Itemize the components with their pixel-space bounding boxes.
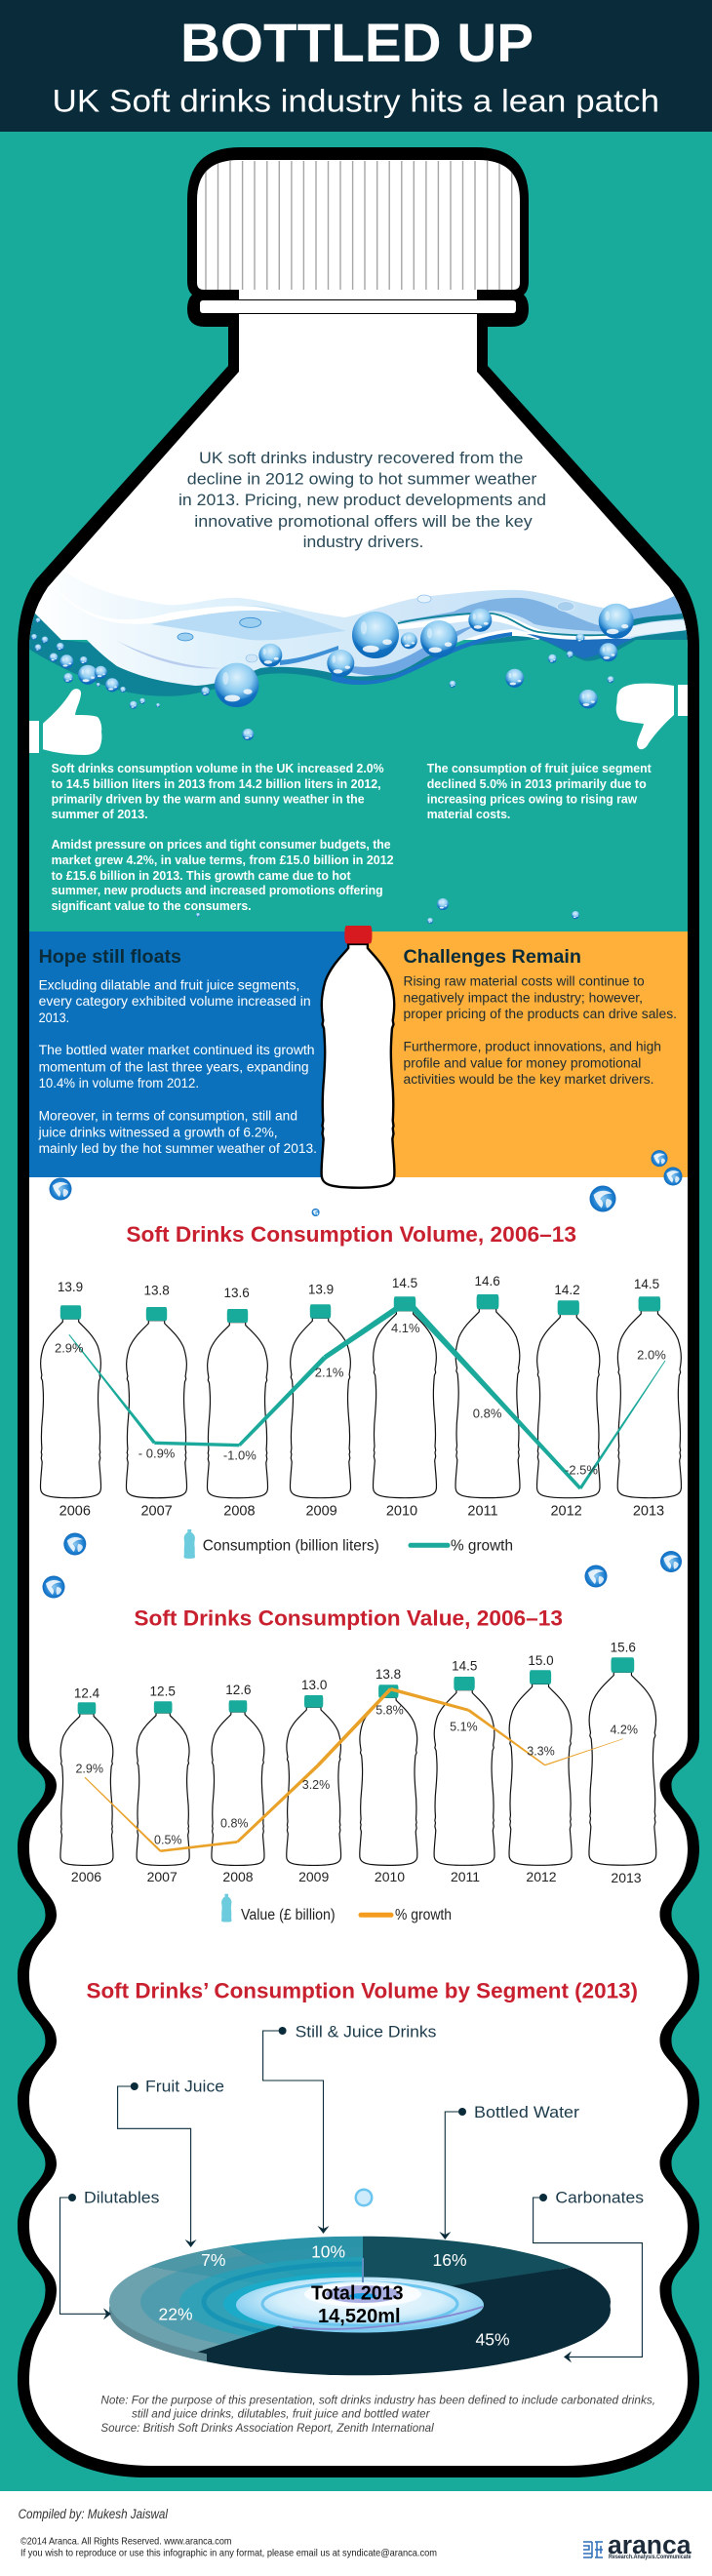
hope text: 10.4% in volume from 2012.: [39, 1076, 199, 1090]
callout: carbonates: Carbonates: [555, 2189, 644, 2206]
callout: carbonates: [534, 2189, 644, 2362]
challenges text: activities would be the key market drivers.: [404, 1072, 653, 1087]
value legend: Value (£ billion): [241, 1907, 336, 1923]
chart title: segment: Soft Drinks’ Consumption Volume by Segment (2013): [86, 1978, 638, 2002]
pie percentages: [158, 2241, 510, 2349]
text: fruit juice decline: increasing prices owing to rising raw: [427, 792, 637, 806]
value years: 2007: [147, 1869, 178, 1884]
text: volume growth: summer of 2013.: [52, 808, 148, 821]
globe bubbles: [43, 1150, 683, 1598]
bottle cap: [195, 156, 527, 302]
hope text: Moreover, in terms of consumption, still and: [39, 1108, 297, 1123]
value growth labels: 3.2%: [302, 1778, 330, 1792]
pie percentages: 10%: [311, 2241, 345, 2261]
volume values: 14.5: [634, 1277, 659, 1291]
pie percentages: 45%: [475, 2329, 510, 2349]
sector: bottled water: [363, 2236, 573, 2286]
sector: dilutables: [98, 2260, 360, 2368]
text: fruit juice decline: declined 5.0% in 2013 primarily due to: [427, 777, 647, 791]
volume legend: [184, 1529, 513, 1559]
sector: still and juice drinks: [195, 2224, 363, 2302]
chart title: value: Soft Drinks Consumption Value, 2006–13: [134, 1606, 563, 1631]
disc rim: [109, 2251, 611, 2376]
volume years: 2011: [467, 1503, 498, 1519]
volume years: 2009: [305, 1503, 337, 1519]
intro text: innovative promotional offers will be the key: [194, 512, 533, 531]
value years: 2008: [222, 1869, 254, 1884]
text: volume growth: [52, 762, 394, 913]
callout: still and juice drinks: [263, 2023, 436, 2234]
value values: [74, 1641, 636, 1700]
text: volume growth: Soft drinks consumption volume in the UK increased 2.0%: [52, 762, 384, 775]
value values: 15.6: [611, 1641, 636, 1655]
volume legend: % growth: [451, 1537, 513, 1554]
volume values: 13.8: [143, 1284, 170, 1298]
text: fruit juice decline: [427, 762, 653, 821]
volume years: 2008: [223, 1503, 256, 1519]
text: volume growth: significant value to the consumers.: [52, 899, 252, 913]
value values: 12.4: [74, 1685, 100, 1700]
text: volume growth: primarily driven by the warm and sunny weather in the: [52, 792, 365, 806]
intro text: [178, 449, 546, 551]
center pool: [236, 2258, 484, 2333]
water wave: [28, 569, 688, 696]
text: volume growth: summer, new products and increased promotions offering: [52, 884, 383, 897]
teal content area: [0, 640, 712, 932]
bottle neck ring: [200, 300, 516, 313]
decorative drop: [355, 2189, 373, 2206]
header band: [0, 0, 712, 132]
sector: carbonates: [197, 2267, 611, 2355]
water ripples: [140, 2247, 579, 2357]
volume years: 2013: [633, 1503, 664, 1519]
volume years: 2012: [550, 1503, 582, 1519]
value years: 2010: [375, 1869, 405, 1884]
copyright text: ©2014 Aranca. All Rights Reserved. www.aranca.com: [20, 2536, 232, 2548]
text: volume growth: market grew 4.2%, in value terms, from £15.0 billion in 2012: [52, 853, 394, 867]
copyright text: If you wish to reproduce or use this infographic in any format, please email us at syndicate@aranca.com: [20, 2548, 437, 2559]
callout: bottled water: Bottled Water: [474, 2103, 579, 2121]
pie center total: 14,520ml: [318, 2306, 401, 2327]
callout: bottled water: [439, 2103, 579, 2239]
intro text: UK soft drinks industry recovered from the: [199, 449, 523, 467]
volume growth labels: - 0.9%: [138, 1447, 176, 1461]
central bottle illustration: [322, 926, 394, 1188]
hope text: juice drinks witnessed a growth of 6.2%,: [38, 1126, 278, 1139]
volume values: 14.6: [474, 1274, 500, 1288]
value growth labels: 0.5%: [154, 1833, 182, 1846]
value values: 13.0: [301, 1678, 327, 1692]
volume bottles: [40, 1294, 682, 1498]
logo: aranca: aranca: [608, 2530, 692, 2559]
value years: 2006: [71, 1869, 101, 1884]
panel: challenges remain: [360, 931, 688, 1177]
heading: challenges remain: Challenges Remain: [404, 947, 581, 968]
water bubbles: [31, 595, 634, 924]
pie sectors: [109, 2236, 611, 2355]
icon: thumbs down: [616, 684, 688, 749]
challenges text: Furthermore, product innovations, and high: [404, 1040, 661, 1054]
callout: dilutables: Dilutables: [84, 2189, 159, 2206]
icon: thumbs up: [28, 689, 101, 755]
intro text: industry drivers.: [303, 533, 423, 551]
value years: 2009: [298, 1869, 329, 1884]
value years: 2013: [611, 1870, 642, 1885]
challenges text: negatively impact the industry; however,: [404, 990, 643, 1005]
volume values: 14.5: [392, 1276, 417, 1290]
subtitle: UK Soft drinks industry hits a lean patch: [53, 84, 659, 119]
text: volume growth: to 14.5 billion liters in 2013 from 14.2 billion liters in 2012,: [52, 777, 381, 791]
challenges text: [404, 974, 677, 1087]
volume values: [59, 1276, 659, 1297]
challenges text: Rising raw material costs will continue to: [404, 974, 645, 989]
pie percentages: 7%: [201, 2250, 225, 2270]
volume growth labels: -2.5%: [565, 1463, 598, 1478]
callout: fruit juice: [118, 2078, 224, 2247]
chart: consumption volume: [40, 1222, 682, 1559]
value growth line: [85, 1687, 623, 1852]
volume growth labels: 2.9%: [55, 1340, 84, 1356]
note and source: still and juice drinks, dilutables, fruit juice and bottled water: [132, 2407, 431, 2421]
chart: volume by segment: [59, 1982, 644, 2376]
volume values: 13.9: [58, 1280, 83, 1294]
volume values: 13.9: [308, 1283, 334, 1297]
value bottles: [60, 1657, 656, 1865]
hope text: The bottled water market continued its growth: [39, 1043, 315, 1057]
volume legend: Consumption (billion liters): [203, 1537, 379, 1554]
value years: [72, 1873, 641, 1882]
callout: dilutables: [60, 2189, 159, 2319]
pie percentages: 22%: [158, 2305, 193, 2324]
intro text: in 2013. Pricing, new product developments and: [178, 491, 546, 509]
pie percentages: 16%: [432, 2250, 467, 2270]
text: volume growth: Amidst pressure on prices and tight consumer budgets, the: [52, 838, 391, 852]
text: fruit juice decline: material costs.: [427, 808, 510, 821]
text: fruit juice decline: The consumption of fruit juice segment: [427, 762, 653, 775]
compiled by credit: Compiled by: Mukesh Jaiswal: [19, 2507, 169, 2521]
value growth labels: 4.2%: [610, 1724, 638, 1737]
hope text: every category exhibited volume increased in: [39, 994, 311, 1009]
volume growth line: [68, 1301, 665, 1489]
challenges text: proper pricing of the products can drive sales.: [404, 1007, 677, 1021]
pie center total: Total 2013: [311, 2282, 404, 2304]
value years: 2011: [451, 1869, 480, 1884]
heading: hope still floats: Hope still floats: [39, 947, 181, 968]
value values: 13.8: [376, 1667, 401, 1682]
hope text: 2013.: [39, 1011, 69, 1025]
chart: consumption value: [60, 1606, 656, 1923]
pie center total: [311, 2282, 404, 2327]
callout: still and juice drinks: Still & Juice Drinks: [296, 2023, 436, 2041]
hope text: [38, 977, 317, 1156]
volume years: 2006: [59, 1503, 91, 1519]
note and source: Note: For the purpose of this presentation, soft drinks industry has been defined to include carbonated drinks,: [100, 2393, 655, 2406]
value growth labels: 5.8%: [376, 1704, 404, 1718]
value legend: [221, 1894, 452, 1923]
challenges text: profile and value for money promotional: [404, 1055, 641, 1071]
copyright text: [20, 2536, 437, 2559]
hope text: momentum of the last three years, expanding: [39, 1059, 309, 1074]
text: volume growth: to £15.6 billion in 2013. This growth came due to hot: [52, 869, 351, 883]
hope text: Excluding dilatable and fruit juice segments,: [39, 977, 299, 993]
value values: 12.5: [150, 1684, 176, 1699]
volume years: 2010: [386, 1503, 417, 1519]
hope text: mainly led by the hot summer weather of 2013.: [39, 1141, 317, 1156]
value growth labels: 5.1%: [450, 1720, 478, 1733]
callout: fruit juice: Fruit Juice: [145, 2078, 224, 2096]
intro text: decline in 2012 owing to hot summer weather: [187, 470, 537, 488]
volume growth labels: 0.8%: [473, 1406, 502, 1420]
value values: 12.6: [225, 1683, 252, 1697]
volume values: 14.2: [554, 1283, 580, 1297]
volume growth labels: 2.1%: [315, 1366, 344, 1380]
volume growth labels: 2.0%: [637, 1347, 666, 1362]
value growth labels: 2.9%: [75, 1762, 103, 1775]
title: BOTTLED UP: [180, 12, 534, 73]
volume years: 2007: [140, 1503, 173, 1519]
value growth labels: 3.3%: [527, 1744, 555, 1758]
note and source: Source: British Soft Drinks Association Report, Zenith International: [100, 2421, 434, 2435]
value growth labels: [75, 1704, 638, 1846]
chart title: volume: Soft Drinks Consumption Volume, 2006–13: [126, 1222, 576, 1247]
value growth labels: 0.8%: [220, 1817, 249, 1831]
value legend: % growth: [395, 1907, 452, 1923]
panel: hope still floats: [28, 931, 360, 1177]
volume growth labels: -1.0%: [223, 1448, 257, 1463]
volume values: 13.6: [223, 1286, 250, 1300]
volume growth labels: 4.1%: [391, 1321, 420, 1335]
note and source: [100, 2393, 655, 2435]
sector: fruit juice: [98, 2224, 360, 2302]
value years: 2012: [526, 1869, 557, 1884]
volume years: [59, 1506, 663, 1516]
value values: 15.0: [528, 1653, 554, 1668]
value values: 14.5: [452, 1658, 477, 1673]
footer panel: [0, 2491, 712, 2576]
logo: aranca: Research.Analysis.Communicate: [609, 2554, 692, 2560]
volume growth labels: [55, 1321, 666, 1478]
